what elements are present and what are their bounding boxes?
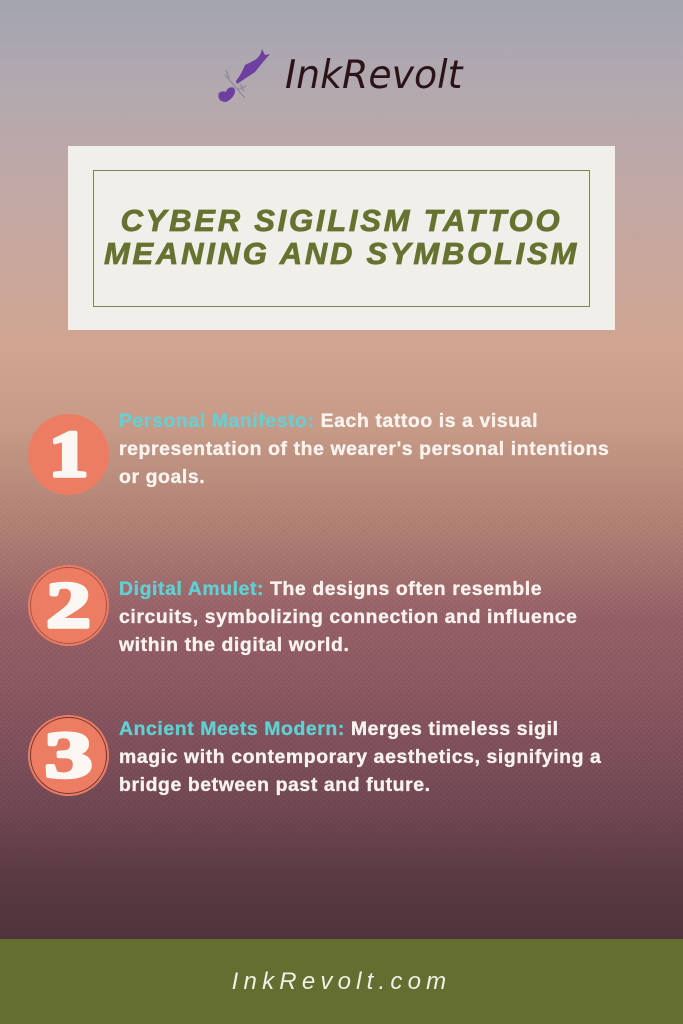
icon: purple quill with heart [218, 49, 270, 102]
item 2 text [118, 578, 578, 656]
item 2 text: within the digital world. [119, 634, 349, 656]
item 3 text: bridge between past and future. [119, 774, 431, 796]
item 1 number badge [28, 414, 109, 495]
item 2 number badge [28, 565, 109, 646]
item 3 text: magic with contemporary aesthetics, signifying a [119, 746, 601, 768]
wordmark: InkRevolt [285, 53, 462, 98]
item 3 number badge: 3 [45, 718, 92, 791]
footer website text: InkRevolt.com [232, 968, 451, 995]
item 2 number badge: 2 [46, 568, 91, 641]
item 2 text: Digital Amulet: The designs often resemble [119, 578, 542, 600]
title heading: CYBER SIGILISM TATTOO [121, 203, 562, 238]
item 1 text: Personal Manifesto: Each tattoo is a visual [119, 410, 538, 432]
item 3 text [119, 718, 602, 796]
title panel [68, 146, 615, 330]
item 2 text: circuits, symbolizing connection and influence [119, 606, 578, 628]
item 3 number badge [28, 715, 109, 796]
title heading [104, 203, 579, 271]
item 1 text [119, 410, 609, 488]
item 1 text: representation of the wearer's personal intentions [119, 438, 609, 460]
item 1 text: or goals. [119, 466, 205, 488]
title heading: MEANING AND SYMBOLISM [104, 236, 579, 271]
title frame [93, 170, 590, 307]
item 3 text: Ancient Meets Modern: Merges timeless sigil [119, 718, 559, 740]
item 1 number badge: 1 [49, 417, 88, 490]
logo: InkRevolt [218, 49, 464, 102]
footer band [0, 939, 683, 1024]
